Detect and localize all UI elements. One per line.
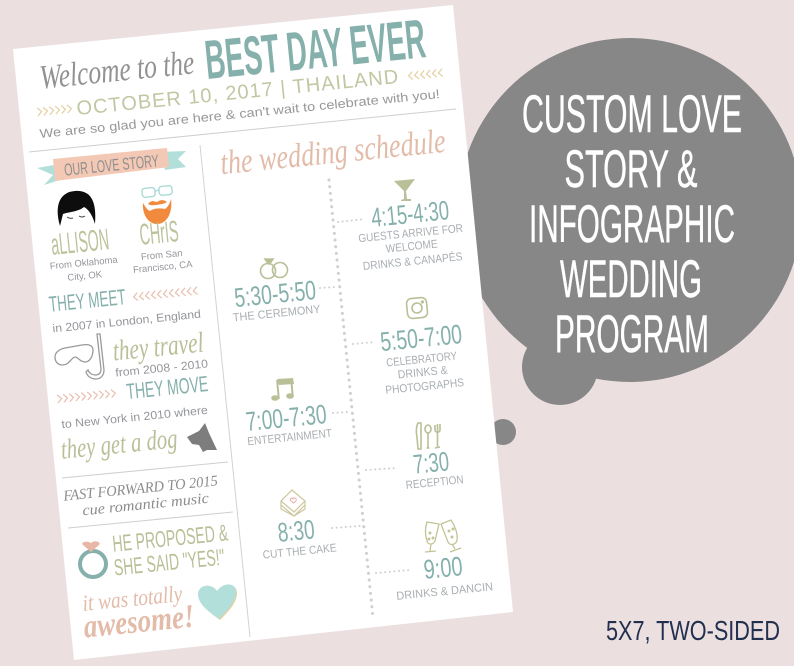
label drinks and: DRINKS & [397,365,448,381]
travel years: from 2008 - 2010 [115,358,209,380]
he proposed: HE PROPOSED & [111,519,229,557]
panel: our love story column: CHrIS [138,215,180,252]
time 4:15-4:30: 4:15-4:30 [370,195,450,233]
fast forward: FAST FORWARD TO 2015 [62,473,219,505]
icon: music notes [271,378,294,401]
icon: instagram camera [406,297,428,319]
chris hometown line 2: Francisco, CA [133,259,194,276]
panel: wedding program paper [13,5,513,660]
time 8:30: 8:30 [276,514,316,548]
icon: man with glasses and orange beard [142,185,172,224]
timeline dotted spine [329,180,373,618]
callout line: story and: STORY & [564,140,698,199]
icon: champagne flutes [425,520,461,552]
icon: engagement ring [80,541,106,577]
icon: cake slice [281,490,305,516]
they get a dog: they get a dog [59,423,179,466]
time 5:50-7:00: 5:50-7:00 [379,319,463,357]
they meet: THEY MEET [48,284,127,317]
icon: peach chevrons move [57,389,116,403]
allison hometown line 2: City, OK [67,269,103,284]
icon: woman with black hair [58,191,95,226]
label celebratory: CELEBRATORY [386,350,458,370]
allison hometown: From Oklahoma [49,255,119,272]
label drinks and canapes: DRINKS & CANAPÉS [362,250,463,273]
icon: martini glass [394,179,415,201]
label reception: RECEPTION [405,474,464,492]
heading: the wedding schedule: the wedding schedule [219,123,447,182]
label guests arrive: GUESTS ARRIVE FOR [358,223,464,245]
label the ceremony: THE CEREMONY [232,304,321,324]
she said yes: SHE SAID "YES!" [113,544,226,580]
they travel: they travel [111,327,205,367]
title: welcome to the: Welcome to the [38,44,196,97]
icon: dog silhouette [187,423,217,452]
time 5:30-5:50: 5:30-5:50 [233,275,317,313]
callout: gray thought bubble [458,38,794,445]
icon: wedding rings [260,259,288,278]
panel: schedule timeline [232,179,494,618]
they move: THEY MOVE [125,371,209,404]
awesome: awesome! [82,599,196,645]
banner: our love story: OUR LOVE STORY [63,151,160,180]
label drinks and dancin: DRINKS & DANCIN [396,581,494,603]
icon: peach chevrons [133,287,198,301]
date and location: OCTOBER 10, 2017 | THAILAND [76,66,399,120]
icon: teal heart [198,584,237,620]
time 7:00-7:30: 7:00-7:30 [244,399,328,437]
it was totally: it was totally [81,581,184,616]
icon: left chevrons [37,105,72,116]
label cut the cake: CUT THE CAKE [262,542,337,562]
icon: right chevrons [408,69,443,80]
time 9:00: 9:00 [422,551,464,585]
icon: snorkel mask [55,334,104,379]
move text: to New York in 2010 where [61,405,208,431]
panel: our love story column: aLLISON [50,223,111,262]
meet text: in 2007 in London, England [52,309,201,335]
icon: knife spoon fork [416,423,440,449]
time 7:30: 7:30 [412,446,451,480]
welcome message: We are so glad you are here & can't wait to celebrate with you! [39,87,440,141]
label entertainment: ENTERTAINMENT [247,428,333,448]
panel: our love story column [37,148,237,645]
label photographs: PHOTOGRAPHS [385,377,465,397]
chris hometown: From San [140,248,183,263]
label welcome: WELCOME [385,238,438,256]
banner: our love story [37,148,186,185]
cue romantic music: cue romantic music [82,491,210,519]
